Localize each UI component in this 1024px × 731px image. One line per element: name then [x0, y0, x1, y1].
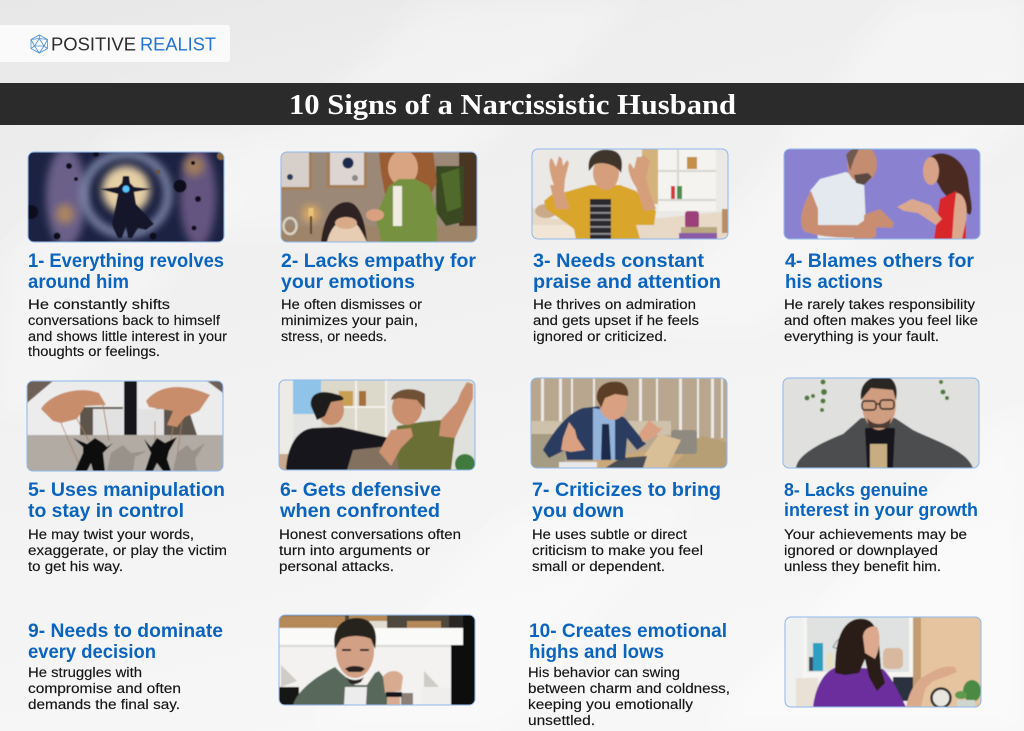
heading — [28, 620, 223, 663]
text block — [28, 297, 228, 359]
text block: personal attacks. — [279, 559, 394, 574]
text block: and gets upset if he feels — [533, 313, 699, 328]
heading — [279, 479, 441, 522]
heading — [28, 250, 224, 293]
heading — [785, 250, 974, 293]
text block: everything is your fault. — [784, 329, 939, 344]
image: cosmic figure — [28, 152, 224, 242]
panel: sign 6 — [279, 380, 475, 574]
text block: His behavior can swing — [528, 665, 680, 680]
heading: 7- Criticizes to bring — [532, 479, 721, 501]
image: couple arguing — [784, 145, 980, 239]
heading: 3- Needs constant — [533, 250, 705, 272]
text block: turn into arguments or — [279, 543, 431, 558]
text block: thoughts or feelings. — [28, 344, 160, 359]
heading — [281, 250, 476, 293]
text block — [784, 297, 978, 344]
heading: when confronted — [279, 500, 440, 522]
text block: keeping you emotionally — [528, 697, 693, 712]
heading: 10- Creates emotional — [529, 620, 727, 642]
heading — [533, 250, 721, 293]
text block: conversations back to himself — [28, 313, 220, 328]
panel: sign 4 — [784, 145, 980, 344]
text block: He rarely takes responsibility — [784, 297, 975, 312]
panel: sign 10 — [528, 617, 981, 728]
text block — [28, 527, 227, 574]
logo: POSITIVE — [51, 34, 136, 55]
heading — [532, 479, 721, 522]
text block: Honest conversations often — [279, 527, 461, 542]
text block: ignored or criticized. — [533, 329, 667, 344]
image: man demanding attention — [532, 149, 728, 239]
heading: every decision — [28, 641, 156, 663]
panel: sign 5 — [27, 381, 227, 574]
text block: demands the final say. — [28, 697, 180, 712]
text block: exaggerate, or play the victim — [28, 543, 227, 558]
text block — [532, 527, 703, 574]
image: puppeteer hands — [27, 381, 223, 471]
image: disinterested man with glasses — [783, 376, 979, 468]
text block: minimizes your pain, — [281, 313, 418, 328]
heading: 9- Needs to dominate — [28, 620, 223, 642]
text block — [528, 665, 730, 728]
panel: sign 9 — [28, 615, 475, 712]
panel: sign 3 — [532, 149, 728, 344]
panel: sign 1 — [24, 147, 228, 359]
text block: He struggles with — [28, 665, 142, 680]
heading: around him — [28, 271, 129, 293]
text block: stress, or needs. — [281, 329, 387, 344]
image: man criticizing at desk — [531, 378, 727, 468]
text block: to get his way. — [28, 559, 123, 574]
text block: criticism to make you feel — [532, 543, 703, 558]
panel: sign 8 — [783, 376, 979, 574]
text block: He constantly shifts — [28, 297, 170, 312]
text block: He may twist your words, — [28, 527, 194, 542]
heading: 1- Everything revolves — [28, 250, 224, 272]
panel: sign 7 — [531, 378, 727, 574]
title banner: 10 Signs of a Narcissistic Husband — [289, 89, 736, 121]
image: two men arguing on sofa — [279, 380, 475, 474]
text block: He often dismisses or — [281, 297, 423, 312]
heading — [529, 620, 727, 663]
heading — [784, 480, 978, 520]
heading: praise and attention — [533, 271, 721, 293]
text block — [533, 297, 699, 344]
image: woman ignoring upset partner — [281, 150, 477, 242]
text block: compromise and often — [28, 681, 181, 696]
text block: unless they benefit him. — [784, 559, 941, 574]
text block: and shows little interest in your — [28, 329, 228, 344]
heading: you down — [532, 500, 624, 522]
text block: He thrives on admiration — [533, 297, 696, 312]
heading: 5- Uses manipulation — [28, 479, 225, 501]
text block — [28, 665, 181, 712]
text block: unsettled. — [528, 713, 595, 728]
text block: small or dependent. — [532, 559, 665, 574]
heading: 8- Lacks genuine — [784, 480, 928, 500]
text block: He uses subtle or direct — [532, 527, 687, 542]
heading: 4- Blames others for — [785, 250, 974, 272]
heading: to stay in control — [28, 500, 184, 522]
icon: logo polyhedron — [31, 35, 48, 53]
text block: between charm and coldness, — [528, 681, 730, 696]
text block: ignored or downplayed — [784, 543, 938, 558]
logo — [0, 25, 230, 62]
heading: interest in your growth — [784, 500, 978, 520]
panel: sign 2 — [281, 150, 477, 344]
heading: your emotions — [281, 271, 415, 293]
logo: REALIST — [140, 34, 216, 55]
heading — [28, 479, 225, 522]
heading: his actions — [785, 271, 883, 293]
title banner — [0, 83, 1024, 125]
heading: highs and lows — [529, 641, 664, 663]
text block: Your achievements may be — [784, 527, 967, 542]
heading: 2- Lacks empathy for — [281, 250, 476, 272]
image: woman shrugging — [785, 617, 981, 708]
text block — [281, 297, 423, 344]
text block — [784, 527, 967, 574]
text block — [279, 527, 461, 574]
heading: 6- Gets defensive — [280, 479, 441, 501]
text block: and often makes you feel like — [784, 313, 978, 328]
image: man with clenched fist — [279, 615, 475, 705]
